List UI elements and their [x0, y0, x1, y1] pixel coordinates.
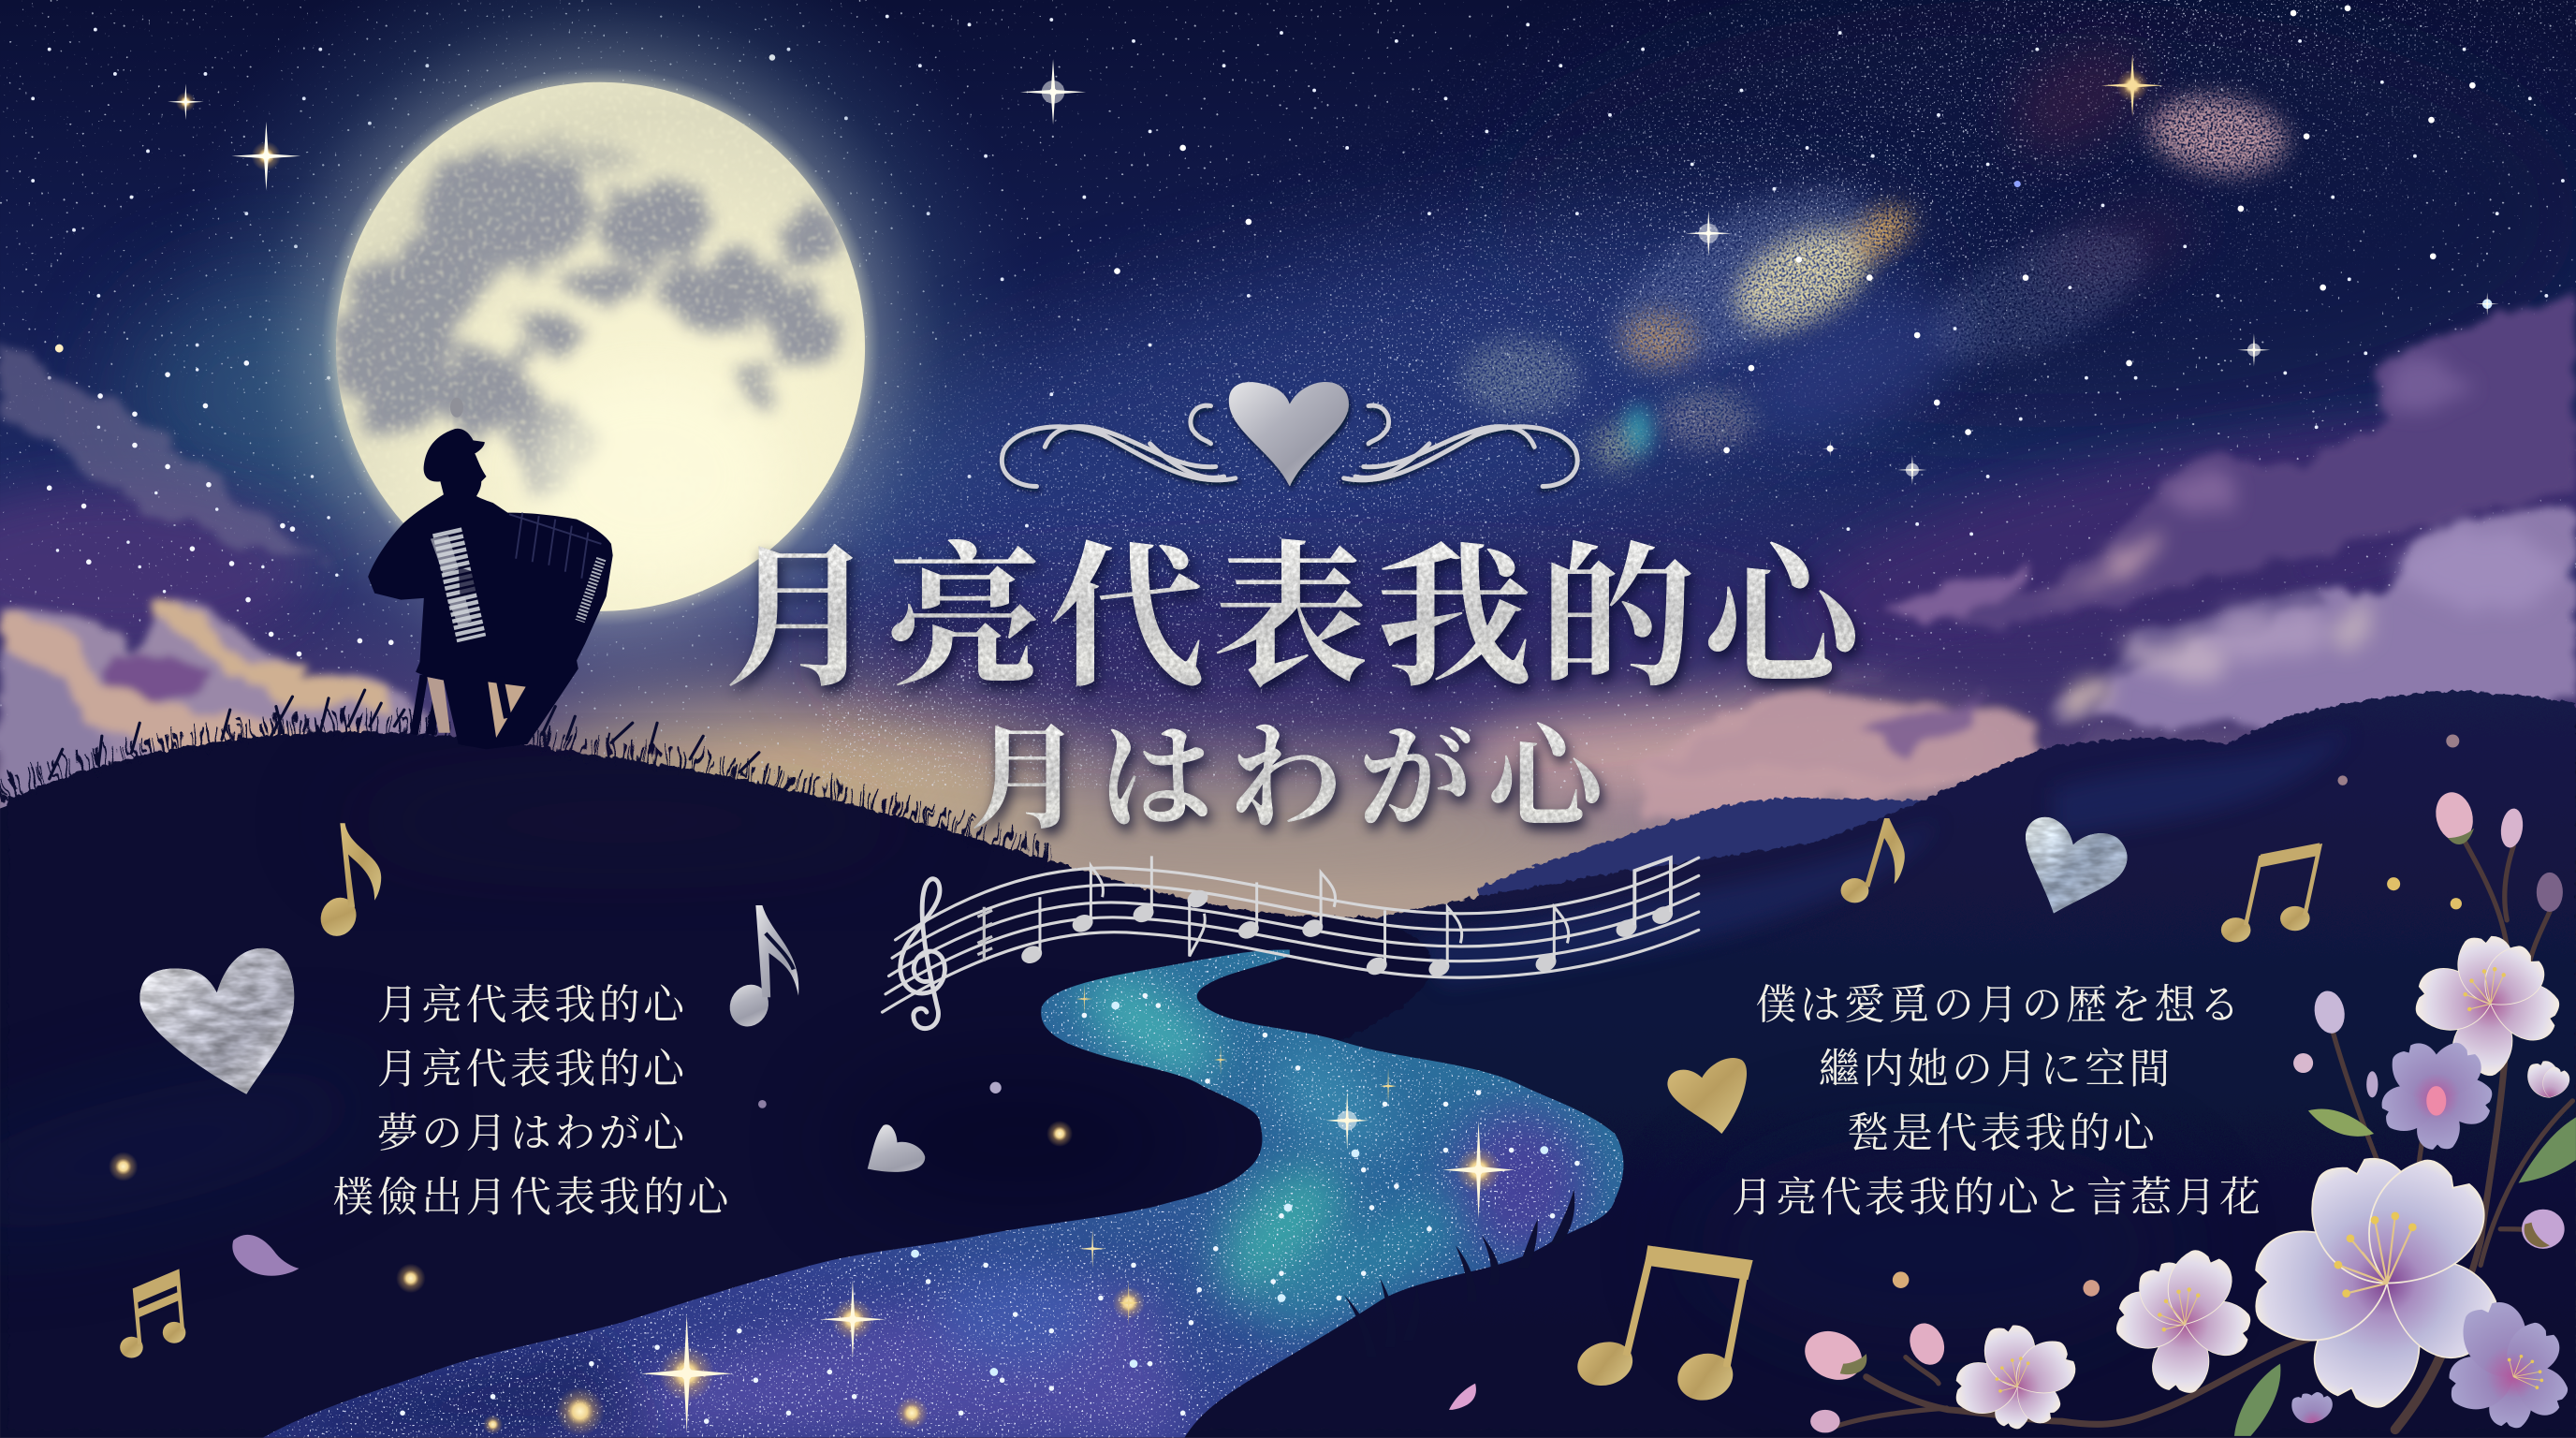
blossom: bottom right flower: [2448, 1296, 2573, 1431]
icon: gold beamed notes: [2221, 843, 2320, 943]
cherry blossom branches: [1827, 835, 2572, 1430]
accordion bellows: [509, 513, 601, 579]
icon: silver sixteenth note: [723, 905, 798, 1033]
cherry blossom buds: [1797, 788, 2565, 1432]
icon: large gold beamed notes: [1573, 1245, 1753, 1406]
notes: [1018, 856, 1676, 979]
right hand buttons: [580, 559, 601, 621]
sparkle stars in the sky: [168, 54, 2498, 485]
left lyrics: 夢の月はわが心: [377, 1111, 687, 1156]
grass blades near the player: [50, 690, 759, 779]
blossom: middle right pink flower: [2378, 1035, 2495, 1150]
right lyrics: 僕は愛覓の月の歴を想る: [1755, 983, 2243, 1028]
foreground base land: [0, 699, 2576, 1438]
stars over the low sky: [50, 348, 391, 654]
glowing dots: [1893, 734, 2462, 1297]
key signature: [977, 907, 992, 961]
subtitle: 月はわが心: [969, 716, 1617, 844]
blossom: large center flower: [2254, 1145, 2508, 1417]
left lyrics: [333, 983, 732, 1220]
icon: gold eighth note: [315, 823, 381, 942]
blossom: lower middle flower: [2114, 1244, 2253, 1396]
icon: pink petal: [1449, 1384, 1476, 1410]
icon: purple petal: [232, 1235, 299, 1276]
far ridge: [1479, 799, 2037, 986]
treble clef: [900, 879, 944, 1029]
right clouds: [1643, 291, 2576, 822]
accordion player silhouette: [368, 429, 613, 749]
milky way nebulae: [1460, 22, 2291, 470]
right hill brush strokes: [1412, 731, 2349, 986]
right hill: [1150, 691, 2576, 1430]
icon: small silver heart: [863, 1123, 931, 1189]
left floating icons: [109, 823, 1073, 1358]
glowing dots: [109, 1082, 1073, 1293]
icon: blue silver heart: [2026, 817, 2128, 914]
left lyrics: 月亮代表我的心: [377, 1048, 687, 1093]
moon: [196, 0, 1003, 758]
accordion keyboard: [431, 531, 476, 639]
right lyrics: 甃是代表我的心: [1848, 1111, 2158, 1156]
right lyrics: [1732, 983, 2263, 1220]
right floating icons: [1449, 734, 2462, 1410]
blossom: lower left flower: [1955, 1323, 2082, 1431]
right lyrics: 繼内她の月に空間: [1819, 1047, 2174, 1093]
icon: gold heart: [1667, 1058, 1747, 1134]
icon: large silver heart: [139, 948, 294, 1094]
main title: 月亮代表我的心: [723, 534, 1878, 707]
cherry blossom leaves: [2234, 1109, 2576, 1436]
left lyrics: 樸儉出月代表我的心: [333, 1175, 732, 1220]
icon: gold beamed notes: [120, 1271, 185, 1358]
left clouds: [0, 348, 435, 829]
star dust field: [0, 0, 2576, 788]
hill shading: [0, 785, 2185, 1364]
right lyrics: 月亮代表我的心と言惹月花: [1732, 1175, 2263, 1220]
icon: gold eighth note: [1841, 818, 1905, 902]
left lyrics: 月亮代表我的心: [377, 983, 687, 1028]
scattered bright stars: [33, 8, 2563, 559]
title ornament: silver heart and flourishes: [1002, 382, 1577, 486]
riverbank reeds: [1344, 1190, 1574, 1357]
cherry blossoms: [1955, 935, 2573, 1431]
grass along hill ridge: [0, 720, 1051, 858]
river sparkle stars: [483, 984, 1515, 1436]
blossom: right edge flower: [2525, 1059, 2573, 1102]
music staff with notes: [883, 856, 1699, 1029]
blossom: upper right flower: [2412, 935, 2563, 1080]
blossom: bottom edge flower: [2288, 1389, 2336, 1429]
galaxy river: [246, 936, 1660, 1438]
left hill: [8, 731, 1431, 1430]
